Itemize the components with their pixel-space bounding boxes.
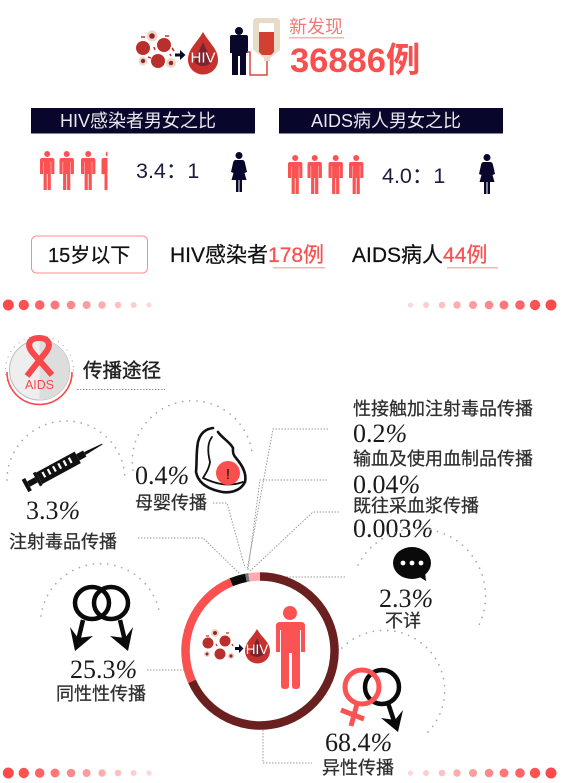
dotted arc [132, 401, 252, 470]
ratio: 3.4：1 [136, 159, 199, 183]
value: 68.4% [325, 728, 392, 757]
value: 0.04% [353, 470, 420, 499]
icon: AIDS ribbon badge [6, 336, 74, 404]
label: 性接触加注射毒品传播 [353, 399, 533, 419]
icon: blood cells turning into HIV drop [136, 30, 218, 74]
heading: transmission routes: 传播途径 [83, 360, 161, 382]
icon: female and male symbols [341, 670, 403, 732]
icon: male figures [40, 151, 108, 190]
HIV count: HIV感染者178例 [170, 244, 324, 267]
label: 不详 [385, 611, 421, 631]
dotted arc [358, 528, 486, 627]
panel: under 15 [32, 236, 498, 273]
dotted arc [41, 564, 160, 616]
panel: HIV sex ratio [31, 108, 255, 192]
icon: female figure [479, 154, 495, 194]
heading bar: AIDS病人男女之比 [311, 111, 461, 131]
label: 母婴传播 [135, 493, 207, 513]
item: sexual contact plus drug use [353, 399, 533, 448]
label: 异性传播 [322, 758, 394, 778]
leader lines [138, 429, 345, 763]
item: homosexual [41, 564, 160, 704]
heading bar: HIV感染者男女之比 [60, 111, 216, 131]
icon: alert: ! [226, 466, 230, 483]
icon: blood cells turning into HIV drop: HIV [190, 50, 216, 66]
icon: two male symbols [70, 587, 133, 651]
dotted arc [7, 421, 125, 480]
label: 同性性传播 [56, 684, 146, 704]
label: 注射毒品传播 [9, 532, 117, 552]
label box: 15岁以下 [48, 244, 130, 267]
value: 0.2% [353, 419, 407, 448]
item: heterosexual [322, 630, 445, 778]
icon: speech bubble [393, 547, 431, 581]
ratio: 4.0：1 [382, 164, 445, 188]
value: 25.3% [70, 655, 137, 684]
item: blood products [353, 449, 533, 499]
label: 既往采血浆传播 [353, 496, 479, 516]
icon: female figure [231, 152, 247, 192]
icon: large male figure in donut [276, 606, 305, 689]
heading: newly discovered: 新发现 [289, 17, 343, 37]
item: plasma donation [353, 496, 479, 543]
dotted arc [342, 630, 445, 733]
panel: AIDS sex ratio [279, 108, 503, 194]
value: 0.4% [135, 461, 189, 490]
value: 0.003% [353, 514, 433, 543]
icon: person with blood bag [230, 18, 280, 75]
heading bar [279, 108, 503, 134]
item: mother-to-child [132, 401, 252, 513]
item: unknown [358, 528, 486, 631]
value: 3.3% [26, 496, 80, 525]
value: 2.3% [379, 584, 433, 613]
big number: 36886例 [290, 42, 420, 80]
icon: cells to HIV in donut: HIV [246, 642, 268, 657]
icon: AIDS ribbon badge: AIDS [25, 377, 54, 392]
icon: syringe [21, 437, 106, 493]
item: injecting drug use [7, 421, 125, 552]
heading bar [31, 108, 255, 134]
AIDS count: AIDS病人44例 [352, 244, 487, 267]
label: 输血及使用血制品传播 [353, 449, 533, 469]
icon: cells to HIV in donut [202, 629, 270, 664]
icon: male figures [288, 155, 363, 194]
icon: pregnant woman [196, 428, 245, 492]
donut chart [186, 576, 335, 725]
label box [32, 236, 148, 273]
